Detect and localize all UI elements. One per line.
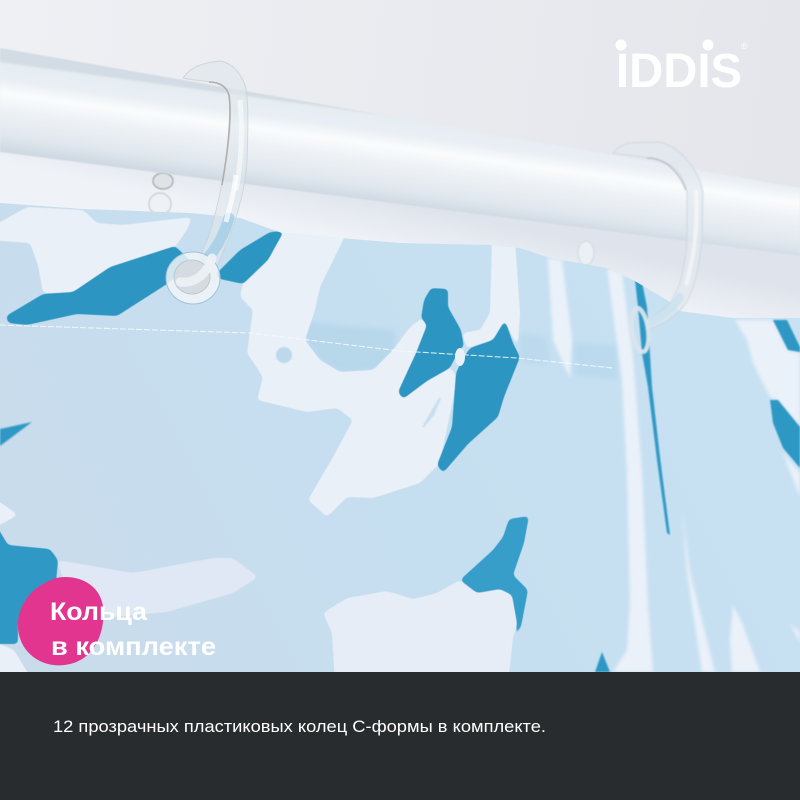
badge heading: Кольца bbox=[50, 598, 148, 626]
badge heading bbox=[50, 598, 216, 661]
ring: right, transparent C-shape bbox=[613, 142, 703, 353]
eyelet bbox=[166, 252, 220, 304]
logo: IDDIS: ® bbox=[741, 41, 748, 51]
base colour details on pale shapes bbox=[276, 347, 440, 427]
ring: left, transparent C-shape bbox=[166, 61, 248, 304]
seam stitches bbox=[0, 325, 613, 368]
small ring end behind rod, right bbox=[578, 241, 594, 265]
logo: IDDIS: IDDIS bbox=[616, 45, 742, 98]
teal pattern shapes, sharp bbox=[0, 231, 529, 644]
pale pattern shapes, left and centre bbox=[0, 207, 520, 685]
small ring end behind rod, left bbox=[149, 173, 173, 215]
bottom caption panel bbox=[0, 672, 800, 800]
pink badge blob bbox=[18, 577, 103, 665]
curtain rod bbox=[0, 48, 800, 256]
badge heading: в комплекте bbox=[51, 633, 216, 661]
area below rod bbox=[0, 150, 800, 330]
ring highlight bbox=[236, 100, 241, 190]
teal pattern shapes, blurred right bbox=[0, 280, 800, 672]
ring shadow line bbox=[209, 82, 230, 185]
ring lower tint bbox=[204, 218, 229, 262]
curtain bbox=[0, 200, 800, 685]
hem tint shapes bbox=[305, 322, 618, 380]
pale pattern shapes, right bbox=[548, 258, 800, 672]
ring body bbox=[183, 61, 248, 267]
caption text: 12 прозрачных пластиковых колец С-формы в комплекте. bbox=[53, 717, 546, 736]
